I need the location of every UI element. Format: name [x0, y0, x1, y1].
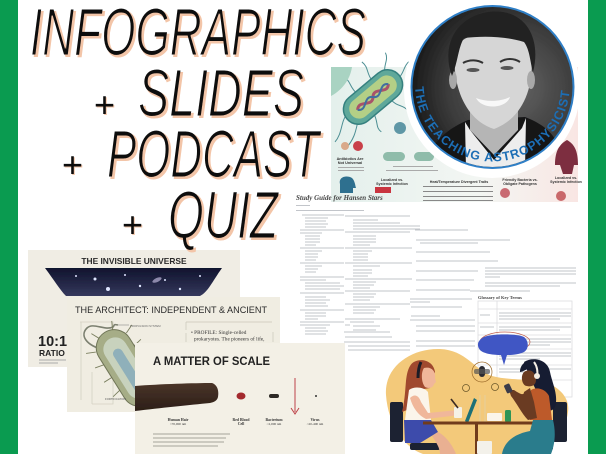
- hair fringe: [520, 360, 538, 372]
- neck: [470, 111, 518, 155]
- label: human hair: Human Hair: [168, 418, 189, 422]
- title line: + slides: SLIDES: [138, 56, 304, 131]
- caption: [39, 360, 66, 363]
- text block: antibiotics: [337, 141, 364, 171]
- title line: infographics: [30, 0, 368, 72]
- right host: [502, 359, 556, 454]
- image: galaxy band: [45, 268, 222, 296]
- floor bag: [477, 441, 492, 454]
- shirt: [530, 388, 552, 420]
- text block: scale paragraph: [153, 434, 230, 446]
- hair: [402, 360, 435, 412]
- icon: pathogen: [500, 188, 510, 198]
- title line: + podcast: +: [63, 145, 84, 186]
- title line: + quiz: QUIZ: [168, 178, 279, 253]
- panel: slide invisible universe: [28, 250, 240, 367]
- heading: architect: THE ARCHITECT: INDEPENDENT & ANCIENT: [75, 305, 267, 315]
- title line: + podcast: [62, 117, 324, 194]
- heading: matter of scale: A MATTER OF SCALE: [153, 354, 270, 368]
- halo: [404, 2, 580, 178]
- left green border: [0, 0, 18, 454]
- text block: profile: • PROFILE: Single-celled: [191, 330, 247, 336]
- phone: [504, 383, 513, 394]
- speech bubble: [478, 332, 530, 365]
- heading: glossary: Glossary of Key Terms: [478, 295, 522, 300]
- photo: [410, 5, 575, 170]
- text block: short answer: [344, 325, 410, 350]
- title line: + quiz: +: [122, 204, 143, 245]
- title line: + podcast: +: [62, 144, 83, 185]
- icon: human hair: [135, 383, 218, 411]
- label: red blood cell: Cell: [238, 422, 244, 426]
- label: bacterium: Bacterium: [265, 418, 283, 422]
- shirt: [405, 388, 431, 420]
- right green border: [588, 0, 606, 454]
- headphones: [418, 362, 421, 378]
- label: fortification: FORTIFICATION: [105, 397, 126, 401]
- icon: scale arrow: [291, 378, 299, 414]
- label: red blood cell: Red Blood: [233, 418, 250, 422]
- title line: + slides: [94, 56, 306, 133]
- text block: profile: prokaryotes. The pioneers of life,: [194, 336, 265, 342]
- text block: localized vs systemic: Systemic Infection: [376, 182, 408, 186]
- panel: slide matter of scale: [135, 343, 345, 454]
- curved name: THE TEACHING ASTROPHYSICIST: [415, 86, 570, 162]
- label: virus: ~20-400 nm: [307, 422, 324, 426]
- panel: study guide document: [296, 194, 576, 397]
- hair: [448, 11, 535, 76]
- portrait badge: [404, 5, 578, 178]
- label: human hair: ~70,000 nm: [170, 422, 187, 427]
- icon: floating bubbles: [462, 384, 498, 392]
- table: traits: [423, 180, 493, 201]
- cup and tablet: [451, 395, 511, 424]
- title line: + quiz: +: [123, 205, 144, 246]
- eyes: [466, 66, 514, 72]
- hair: [524, 359, 556, 411]
- table: [423, 422, 533, 454]
- label: bacterium: ~2,000 nm: [267, 422, 282, 427]
- chairs: [390, 402, 567, 450]
- title line: + slides: +: [94, 84, 115, 125]
- text block: question column 2: [345, 216, 420, 337]
- icon: pathogen right: [556, 191, 566, 201]
- heading: study guide: Study Guide for Hansen Stars: [296, 194, 383, 202]
- yellow blob: [386, 349, 568, 454]
- icon: bacterium: [269, 394, 279, 398]
- icon: bacterium: [307, 39, 432, 159]
- jacket: [436, 117, 554, 167]
- title line: + podcast: PODCAST: [109, 119, 324, 194]
- text block: friendly bacteria: Obligate Pathogens: [503, 182, 537, 186]
- title line: + slides: SLIDES: [140, 58, 306, 133]
- text block: profile: [191, 330, 265, 342]
- jeans: [502, 420, 555, 454]
- icon: small bacterium at left edge: [331, 67, 352, 96]
- table: traits: Heat/Temperature Divergent Traits: [430, 180, 488, 184]
- title line: + slides: +: [95, 85, 116, 126]
- eyebrows: [463, 59, 520, 63]
- icon: human body: [555, 140, 578, 174]
- arm: [509, 388, 537, 420]
- stat: 10:1 ratio: RATIO: [39, 348, 65, 358]
- leg: [432, 432, 456, 454]
- table: glossary: [478, 301, 572, 397]
- stat: 10:1 ratio: [38, 334, 67, 358]
- icon: floating microphone: [472, 362, 492, 382]
- panel: slide architect: [67, 297, 280, 418]
- label: propulsion system: PROPULSION SYSTEM: [130, 324, 161, 328]
- text block: localized: Localized vs.: [555, 176, 577, 180]
- label: bacterium: [265, 418, 283, 427]
- title line: + quiz: [122, 178, 281, 255]
- smile: [476, 97, 510, 107]
- label: virus: Virus: [311, 418, 320, 422]
- text block: localized: [550, 176, 582, 184]
- text block: antibiotics: Not Universal: [338, 161, 362, 165]
- text block: friendly bacteria: Friendly Bacteria vs.: [502, 178, 538, 182]
- image: bacterium diagram: [79, 313, 172, 418]
- icon: red bar: [375, 187, 391, 193]
- face: [522, 370, 536, 386]
- face: [455, 32, 532, 129]
- title line: + quiz: QUIZ: [170, 180, 281, 255]
- title: [30, 0, 368, 255]
- shirt: [465, 118, 526, 170]
- label: red blood cell: [233, 418, 250, 426]
- label: human hair: [168, 418, 189, 427]
- headphones: [534, 362, 537, 378]
- text block: question column 1: [296, 206, 364, 334]
- face: [422, 368, 436, 388]
- ears: [449, 71, 457, 89]
- text block: antibiotics: Antibiotics Are: [337, 157, 363, 161]
- icon: virus dot: [315, 395, 317, 397]
- ring: [410, 5, 574, 169]
- text block: localized vs systemic: [376, 178, 408, 186]
- icon: cell division diagram: [383, 152, 438, 171]
- illustration: podcast hosts: [386, 332, 568, 454]
- icon: magnifier: [394, 122, 406, 134]
- icon: head profile: [340, 176, 356, 193]
- heading: invisible universe: THE INVISIBLE UNIVERSE: [81, 256, 187, 266]
- text block: localized: Systemic Infection: [550, 180, 582, 184]
- label: virus: [307, 418, 324, 426]
- ornament frame: [186, 322, 273, 342]
- icon: red blood cell: [236, 392, 246, 400]
- text block: localized vs systemic: Localized vs.: [381, 178, 403, 182]
- arm: [410, 395, 460, 419]
- text block: question column 4: [470, 268, 576, 291]
- left host: [402, 360, 460, 454]
- title line: + podcast: PODCAST: [107, 117, 322, 192]
- stat: 10:1 ratio: 10:1: [38, 334, 67, 350]
- skirt: [404, 420, 438, 443]
- panel: bacteria infographic: [307, 39, 582, 202]
- text block: question column 3: [410, 230, 510, 346]
- text block: friendly bacteria: [502, 178, 538, 186]
